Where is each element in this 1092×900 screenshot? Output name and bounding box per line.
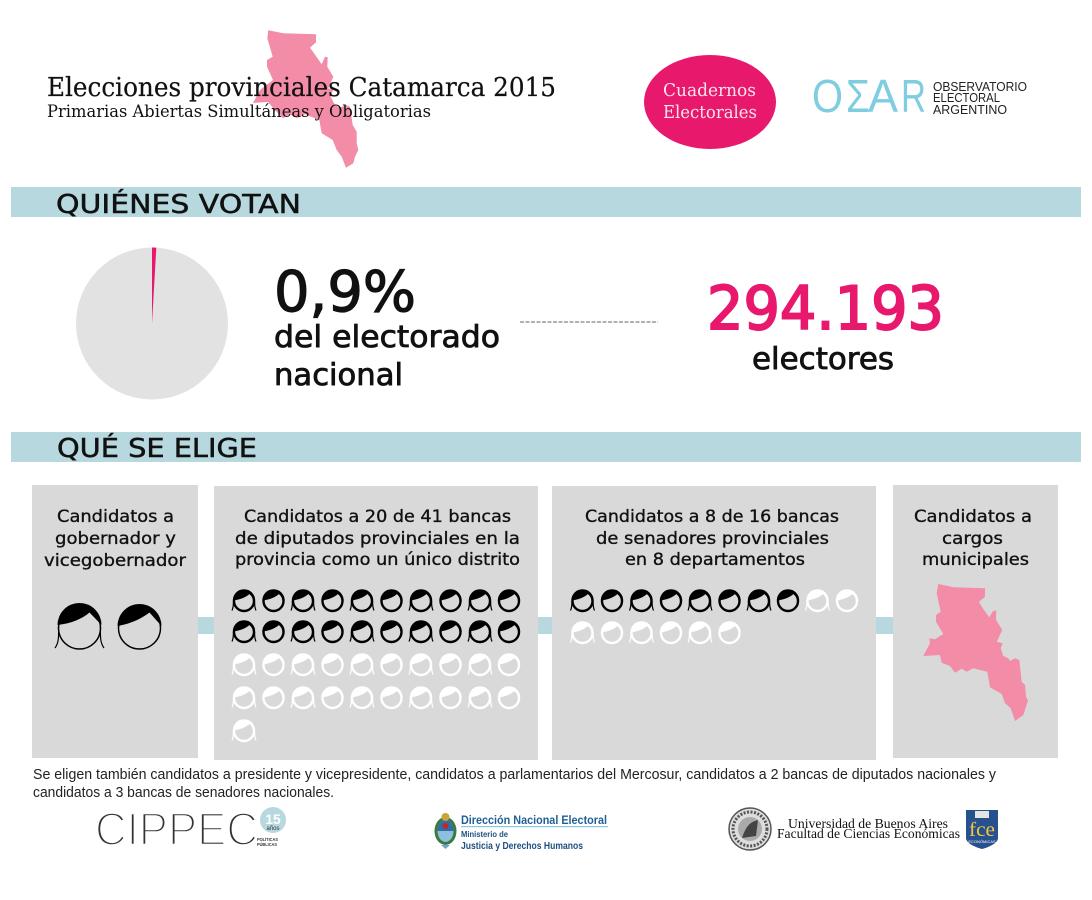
icon: escudo FCE: fce — [969, 819, 995, 841]
icon: escudo nacional — [434, 813, 456, 849]
logo: Dirección Nacional Electoral — [434, 813, 608, 852]
section heading: Quiénes votan: QUIÉNES VOTAN — [56, 188, 301, 220]
panel text: senadores — [585, 507, 839, 570]
logo: CIPPEC: años — [266, 826, 280, 832]
panel: diputados provinciales — [214, 486, 538, 760]
logo: Universidad de Buenos Aires: Universidad de Buenos Aires — [788, 817, 948, 832]
logo: OEAR — [812, 70, 1027, 122]
subtitle: Primarias Abiertas Simultáneas y Obligatorias — [47, 102, 431, 122]
section heading: Qué se elige — [11, 432, 1081, 464]
panel text: diputados: Candidatos a 20 de 41 bancas — [244, 507, 511, 527]
title: Elecciones provinciales Catamarca 2015 — [47, 73, 556, 103]
footnote — [33, 767, 997, 801]
logo: Dirección Nacional Electoral: Justicia y Derechos Humanos — [461, 840, 583, 852]
stat: 0,9% del electorado nacional: 0,9% — [274, 260, 416, 325]
panel text: diputados — [235, 507, 520, 570]
map: Catamarca panel — [923, 584, 1028, 721]
icon: escudo FCE — [966, 810, 998, 849]
stat: 0,9% del electorado nacional — [274, 260, 500, 393]
panel: senadores provinciales — [552, 486, 876, 760]
logo: CIPPEC: 15 — [265, 811, 281, 827]
stat: 294.193 electores — [707, 274, 944, 377]
panel text: senadores: Candidatos a 8 de 16 bancas — [585, 507, 839, 527]
footnote: Se eligen también candidatos a presidente y vicepresidente, candidatos a parlamentarios del Mercosur, candidatos a 2 bancas de diputados nacionales y — [33, 767, 997, 783]
panel text: gobernador: vicegobernador — [44, 551, 186, 571]
logo: Dirección Nacional Electoral: Ministerio de — [461, 829, 508, 839]
icons: 8 bancas restantes — [570, 589, 858, 643]
panel text: gobernador: gobernador y — [55, 529, 176, 549]
logo: OEAR: ARGENTINO — [933, 103, 1007, 117]
pie chart: 0,9% — [76, 247, 228, 400]
logo: OEAR: A — [868, 70, 898, 122]
panel: cargos municipales — [893, 485, 1058, 758]
connector bars — [198, 617, 893, 634]
panel text: municipales: municipales — [922, 550, 1029, 570]
panel text: senadores: en 8 departamentos — [625, 550, 805, 570]
panel: gobernador — [32, 485, 198, 758]
stat: 294.193 electores: 294.193 — [707, 274, 944, 344]
logo: Universidad de Buenos Aires — [729, 808, 998, 850]
icons: 20 bancas en juego — [232, 589, 520, 642]
panel text: gobernador — [44, 507, 186, 571]
footnote: candidatos a 3 bancas de senadores nacionales. — [33, 785, 334, 801]
icon: escudo FCE: ECONÓMICAS — [968, 839, 996, 844]
panel text: diputados: provincia como un único distrito — [235, 550, 520, 570]
dashed connector — [520, 321, 658, 323]
logo: CIPPEC: CIPPEC — [95, 803, 258, 855]
stat: 294.193 electores: electores — [752, 342, 894, 377]
logo: OEAR: OBSERVATORIO — [933, 80, 1027, 94]
badge: Cuadernos Electorales: Electorales — [663, 102, 757, 123]
logo: CIPPEC: POLÍTICAS — [257, 835, 278, 842]
icon: gobernadora — [55, 603, 104, 649]
section heading: Qué se elige: QUÉ SE ELIGE — [57, 432, 257, 464]
logo: Universidad de Buenos Aires: Facultad de Ciencias Económicas — [777, 827, 960, 842]
badge: Cuadernos Electorales: Cuadernos — [663, 80, 756, 101]
section heading: Quiénes votan — [11, 187, 1081, 220]
panel text: gobernador: Candidatos a — [57, 507, 174, 527]
logo: OEAR: ELECTORAL — [933, 91, 1000, 105]
logo: OEAR: O — [812, 70, 843, 122]
icons: 8 bancas en juego — [570, 589, 799, 611]
stat: 0,9% del electorado nacional: nacional — [274, 358, 403, 393]
panel text: diputados: de diputados provinciales en la — [235, 529, 520, 549]
badge: Cuadernos Electorales — [644, 55, 776, 149]
icon: sello UBA — [729, 808, 771, 850]
icon: vicegobernador — [118, 604, 162, 649]
logo: CIPPEC: PÚBLICAS — [257, 841, 277, 847]
panel text: municipales: cargos — [942, 529, 1003, 549]
panel text: municipales: Candidatos a — [914, 507, 1032, 527]
logo: Dirección Nacional Electoral: Dirección Nacional Electoral — [461, 813, 607, 827]
map: Catamarca header — [253, 30, 358, 168]
logo: OEAR: Σ — [846, 70, 870, 122]
logo: OEAR: R — [901, 70, 926, 122]
panel text: senadores: de senadores provinciales — [596, 529, 829, 549]
stat: 0,9% del electorado nacional: del electorado — [274, 320, 500, 355]
icons: 21 bancas restantes — [232, 653, 520, 741]
panel text: municipales — [914, 507, 1032, 570]
